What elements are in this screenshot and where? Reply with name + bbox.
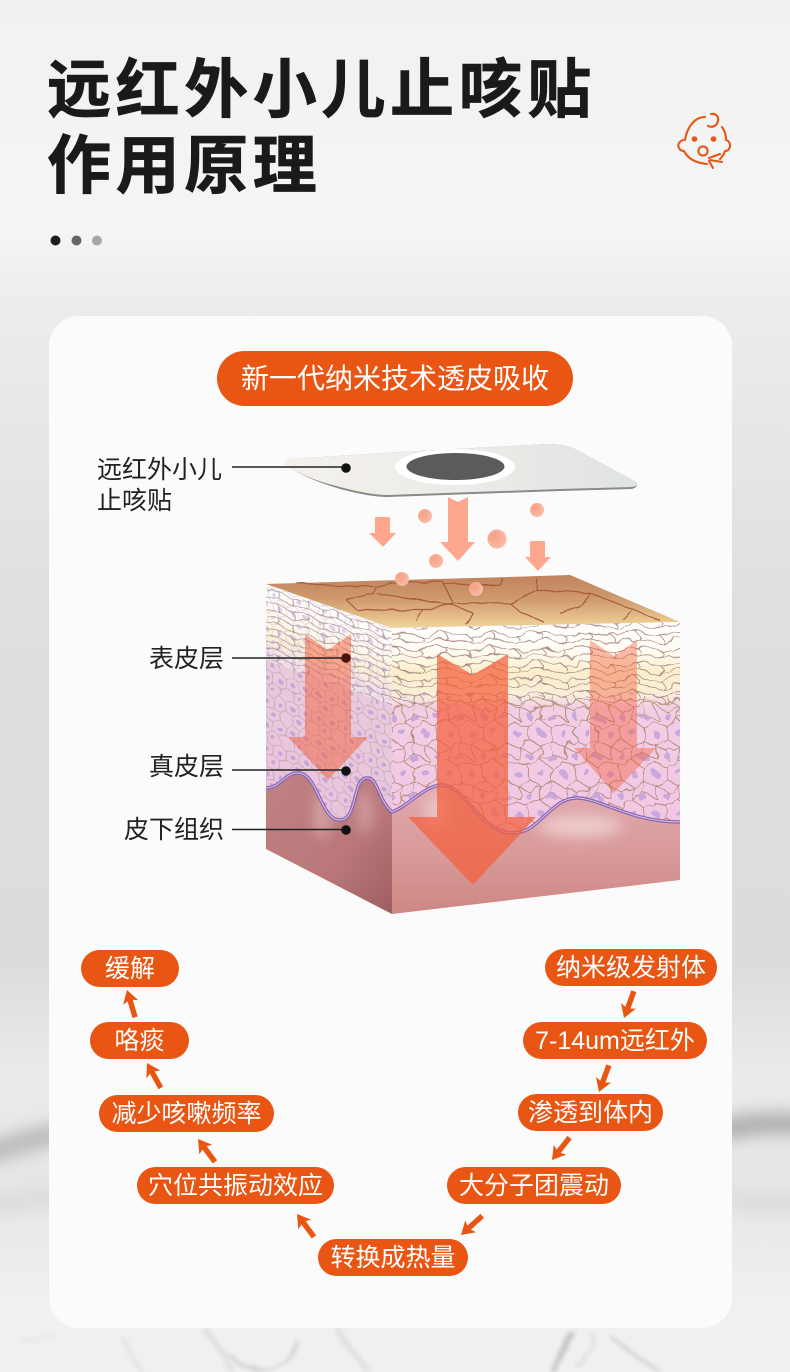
heading pill bbox=[217, 351, 573, 406]
step pill: molecular vibration: 大分子团震动 bbox=[459, 1172, 609, 1200]
step pill: reduce cough frequency bbox=[99, 1095, 274, 1132]
penetration arrows in skin bbox=[288, 634, 656, 885]
step pill: penetrates body: 渗透到体内 bbox=[528, 1099, 653, 1127]
step pill: relief bbox=[81, 950, 179, 987]
label: patch: 止咳贴 bbox=[97, 487, 172, 515]
step pill: relief: 缓解 bbox=[105, 955, 155, 983]
basement membrane wave bbox=[266, 773, 680, 833]
pagination dots bbox=[50, 236, 102, 246]
label: subcutaneous tissue: 皮下组织 bbox=[124, 816, 224, 844]
panel: main white card bbox=[49, 316, 732, 1328]
pointer lines and dots bbox=[232, 463, 351, 835]
step pill: convert to heat bbox=[318, 1239, 468, 1276]
step pill: nano emitter bbox=[545, 949, 717, 986]
step pill: far infrared bbox=[523, 1022, 707, 1059]
skin surface bbox=[266, 575, 680, 628]
title bbox=[47, 54, 596, 202]
step pill: reduce cough frequency: 减少咳嗽频率 bbox=[111, 1100, 262, 1128]
heading pill: 新一代纳米技术透皮吸收 bbox=[241, 363, 549, 394]
step pill: expectoration: 咯痰 bbox=[114, 1027, 164, 1055]
step pill: far infrared: 7-14um远红外 bbox=[535, 1027, 695, 1055]
diagram: patch and skin cross-section bbox=[232, 444, 680, 914]
step pill: nano emitter: 纳米级发射体 bbox=[556, 954, 706, 982]
title: 作用原理 bbox=[47, 130, 321, 202]
step pill: acupoint resonance: 穴位共振动效应 bbox=[148, 1172, 323, 1200]
skin block: left face bbox=[266, 586, 392, 914]
icon: coughing baby bbox=[677, 112, 732, 170]
step pill: convert to heat: 转换成热量 bbox=[330, 1244, 456, 1272]
title: 远红外小儿止咳贴 bbox=[47, 54, 596, 126]
particles bbox=[395, 503, 544, 596]
absorption arrows above skin bbox=[369, 497, 551, 571]
patch bbox=[286, 444, 637, 497]
step pill: acupoint resonance bbox=[137, 1167, 334, 1204]
step pill: penetrates body bbox=[518, 1094, 663, 1131]
label: patch: 远红外小儿 bbox=[97, 456, 222, 484]
label: dermis: 真皮层 bbox=[149, 753, 224, 781]
label: patch bbox=[97, 456, 222, 515]
skin block: right face bbox=[392, 622, 680, 914]
step pill: expectoration bbox=[90, 1022, 189, 1059]
step pill: molecular vibration bbox=[447, 1167, 621, 1204]
label: epidermis: 表皮层 bbox=[149, 645, 224, 673]
